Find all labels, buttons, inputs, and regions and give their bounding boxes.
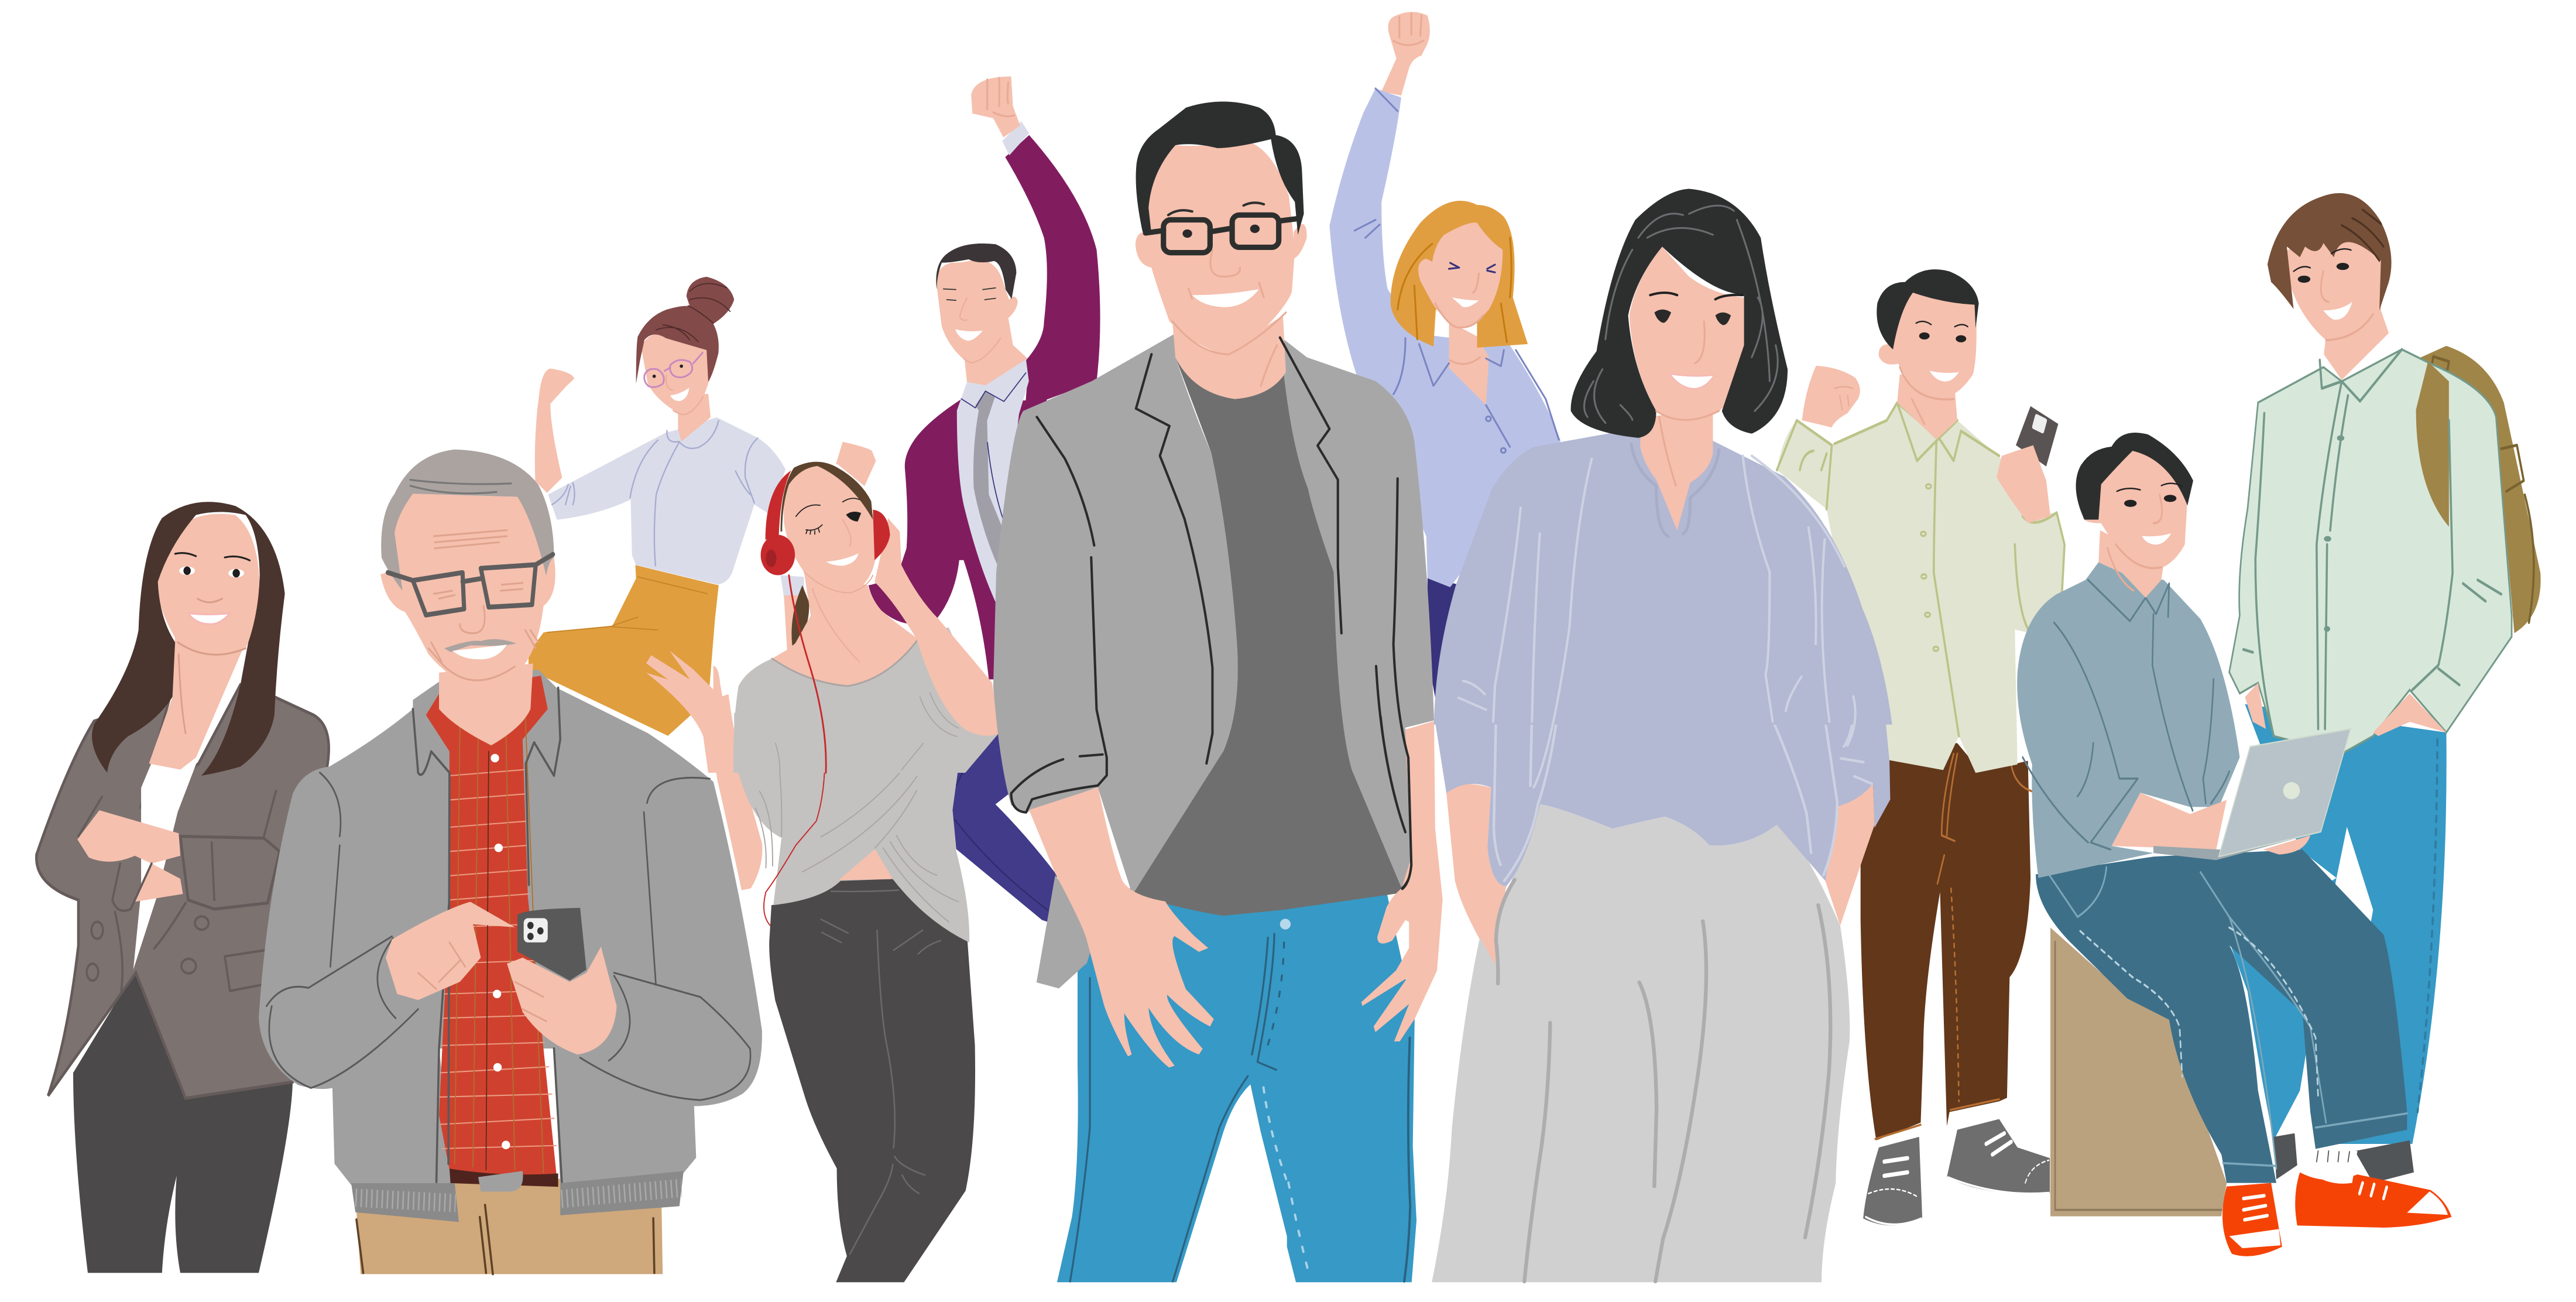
black hair [2076,433,2193,520]
crossed arms [77,810,180,864]
orange shoe right [2295,1172,2451,1228]
sleeve lines [266,773,750,1100]
raised fist [1802,366,1860,427]
smile [452,645,507,659]
raised hand [1381,12,1430,95]
blazer [36,685,329,1098]
yellow skirt [529,565,719,736]
hidden fist [836,442,876,486]
neck [1640,411,1713,530]
collar [413,688,562,1182]
navy trousers [952,728,1057,922]
grey top [733,627,999,773]
placket [486,752,489,1170]
smile [670,388,689,401]
smartphone [517,908,586,981]
blouse upper [1434,432,1892,725]
shirt body [1827,403,2023,773]
grey top lower part [734,713,969,943]
smile [826,553,859,566]
jeans [2245,704,2447,1144]
fist [971,77,1020,138]
open eye [846,512,861,522]
neck [2324,310,2389,380]
shirt buttons [490,754,510,1149]
earphone wire [764,717,825,926]
headband [766,470,791,540]
hair [1877,269,1979,350]
face [1879,293,1977,399]
lapel and pocket lines [78,791,276,991]
face [784,466,876,592]
blue-grey shirt [2017,562,2239,878]
hand in pocket [2373,694,2446,736]
smile [2323,302,2352,320]
dark leggings [769,879,975,1282]
belt [450,1169,558,1187]
eyes [179,567,195,575]
dark socks [2355,1140,2414,1183]
figure: woman in brown blazer with crossed arms [36,502,329,1273]
hair and bun [636,277,734,383]
blazer flap [1037,875,1092,988]
plaid lines [439,770,556,1149]
grey T-shirt [1128,357,1408,916]
blue shirt [1329,88,1560,587]
wire upper [789,575,826,773]
jeans stitching [1267,943,1284,1048]
hand near skirt [646,651,737,773]
face [2287,225,2381,340]
purple jacket [869,340,1052,679]
teal jeans [2036,849,2407,1183]
smile [955,329,983,341]
grey jacket [259,670,762,1185]
orange shoe left [2222,1183,2282,1256]
figure: man in pale green shirt with phone [1777,269,2064,1225]
shirt [2229,350,2512,754]
knit hems [351,1183,459,1222]
white shirt [957,357,1029,602]
neck [1449,321,1489,405]
raised arm [535,369,574,493]
pointing hand [386,902,515,1000]
neck [1897,374,1957,440]
face [937,259,1027,385]
hair [780,462,873,532]
backpack [2415,346,2541,633]
neckline and folds [1631,444,1719,536]
hand under laptop [2263,835,2310,855]
laptop logo [2283,782,2300,799]
blazer left [993,333,1238,895]
glasses [388,554,553,615]
neck [678,394,711,441]
raised arm [874,518,1000,736]
laptop base [2153,832,2321,860]
pink glasses [644,353,702,387]
grey tie [973,390,1004,568]
cuff [180,837,280,909]
smile [188,613,230,624]
cuff [1002,121,1029,155]
object: cardboard box seat [2050,927,2227,1217]
blazer right [1280,336,1434,890]
skirt folds [1496,880,1830,1282]
left cuff [1777,420,1834,509]
hair [92,502,285,776]
phone camera [524,918,548,943]
ponytail [791,585,809,646]
shirt [548,417,786,585]
blazer lines [1011,338,1411,889]
sneakers [1863,1137,1922,1225]
neck [1172,316,1286,399]
neck [149,636,246,770]
blouse hem [1434,715,1889,886]
raised sleeve [1005,135,1100,405]
neck [2098,530,2164,598]
hair [1136,101,1304,235]
ear cup right [873,510,890,560]
face [1418,222,1503,328]
grey hair [381,450,554,591]
moustache [444,639,516,652]
brown hair [2268,193,2392,310]
face [157,514,260,655]
figure: seated man with laptop [2017,433,2407,1256]
white blouse [133,715,198,969]
smile [1192,289,1259,307]
figure: woman with hair bun and glasses [529,277,876,736]
phone [2016,406,2058,467]
blonde hair [1391,201,1528,348]
sleeve edge [1873,762,1890,828]
jeans right [1287,892,1416,1282]
right arm [1825,784,1875,926]
ear cup left [761,535,795,575]
red plaid shirt [426,676,557,1177]
laptop lid [2219,729,2351,856]
dark hair [936,244,1016,299]
forearm [2112,793,2227,849]
forearm [706,694,762,890]
face [1630,246,1744,420]
black hair [1571,189,1788,438]
face [641,334,709,414]
smile [1930,371,1959,382]
brown trousers [1861,743,2030,1140]
hand with phone [1997,445,2050,523]
chest [772,572,918,686]
face [1136,139,1295,354]
figure: man with black glasses and grey blazer [993,101,1443,1282]
jeans left [1057,896,1288,1282]
left arm [1446,784,1506,965]
smile [1452,297,1479,307]
white sock [2310,1149,2358,1184]
grey skirt [1432,804,1850,1282]
figure: man in purple jacket with raised fist [869,77,1100,922]
left arm and hand [1029,787,1214,1068]
smile [1670,374,1714,389]
right cuff [2015,513,2064,633]
glasses [1145,215,1298,253]
holding hand [507,947,617,1054]
figure: older man with smartphone [259,450,762,1274]
smile [2142,533,2171,544]
figure: woman with red headphones [646,462,1000,1282]
navy skirt [1428,577,1457,698]
bare midriff [839,849,893,880]
tan trousers [354,1179,663,1274]
right arm and hand [1361,721,1443,1041]
figure: man with brown hair and backpack [2229,193,2541,1228]
face [2083,449,2187,570]
trousers [73,969,293,1273]
neck [439,663,533,745]
figure: woman with black bob and lavender blouse [1432,189,1892,1282]
figure: blonde woman with raised arm [1329,12,1560,698]
face [380,494,555,690]
